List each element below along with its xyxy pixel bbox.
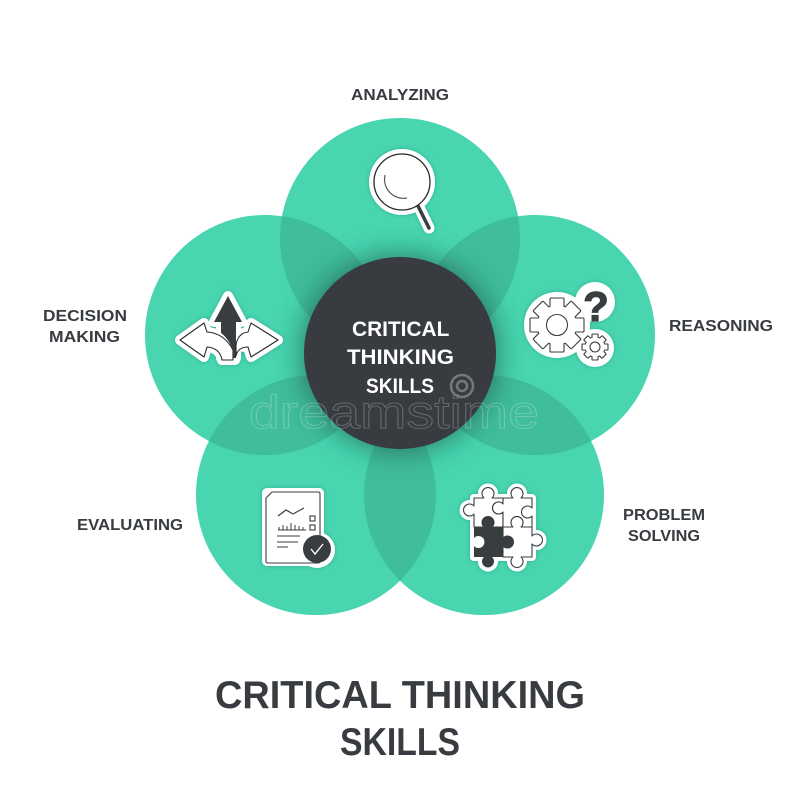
label: decision making: MAKING bbox=[49, 329, 120, 346]
label: analyzing: ANALYZING bbox=[351, 87, 449, 104]
center circle shadow bbox=[300, 253, 500, 453]
icon: report with check mark bbox=[262, 488, 335, 568]
overlap: analyzing and decision making bbox=[280, 216, 362, 318]
label: problem solving: PROBLEM bbox=[623, 507, 705, 524]
circle: evaluating bbox=[196, 375, 436, 615]
circle: problem solving bbox=[364, 375, 604, 615]
icon: three-way decision arrows bbox=[180, 296, 278, 360]
overlap: reasoning and problem solving bbox=[460, 376, 591, 455]
venn diagram: five overlapping circles bbox=[145, 118, 655, 615]
title: CRITICAL THINKING bbox=[215, 674, 585, 717]
icon: puzzle pieces bbox=[464, 488, 542, 567]
center circle label: SKILLS bbox=[366, 375, 434, 398]
label: problem solving: SOLVING bbox=[628, 528, 700, 545]
icon: magnifying glass bbox=[369, 149, 435, 228]
label: decision making: DECISION bbox=[43, 308, 127, 325]
center circle bbox=[304, 257, 496, 449]
center circle label: CRITICAL bbox=[352, 318, 450, 341]
watermark bbox=[249, 375, 539, 438]
circle: analyzing bbox=[280, 118, 520, 358]
label: evaluating: EVALUATING bbox=[77, 517, 183, 534]
title: SKILLS bbox=[340, 721, 460, 764]
icon: gears and question mark bbox=[524, 282, 615, 367]
label: reasoning: REASONING bbox=[669, 318, 773, 335]
watermark: dreamstime bbox=[249, 386, 539, 438]
overlap: analyzing and reasoning bbox=[438, 216, 520, 318]
circle: decision making bbox=[145, 215, 385, 455]
overlap: decision making and evaluating bbox=[209, 376, 340, 455]
overlap: evaluating and problem solving bbox=[364, 446, 436, 580]
icon: gears and question mark: ? bbox=[583, 283, 609, 330]
center circle label: THINKING bbox=[347, 346, 454, 369]
circle: reasoning bbox=[415, 215, 655, 455]
